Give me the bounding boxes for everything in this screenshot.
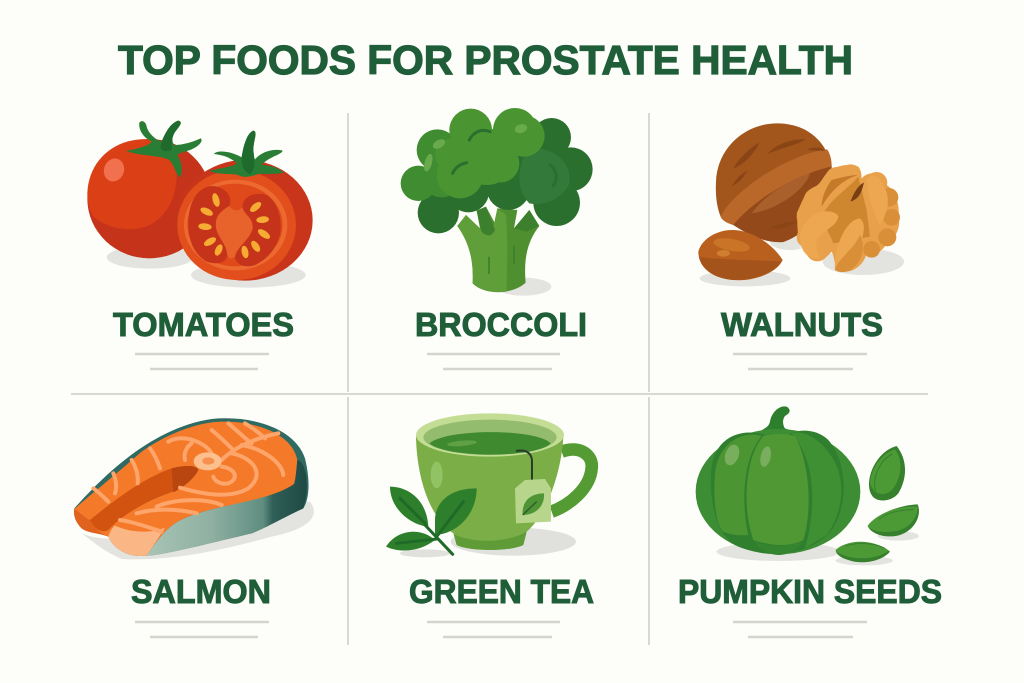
panel: broccoli bbox=[401, 108, 593, 369]
icon: pumpkin bbox=[696, 406, 860, 561]
placeholder lines: green tea bbox=[427, 622, 560, 637]
panel: walnuts bbox=[698, 123, 904, 369]
placeholder lines: tomatoes bbox=[135, 354, 269, 369]
placeholder lines: broccoli bbox=[427, 354, 560, 369]
icon: tomatoes bbox=[87, 121, 313, 288]
label: green tea: GREEN TEA bbox=[409, 573, 594, 610]
canopy front bbox=[401, 129, 462, 201]
icon: green tea cup bbox=[400, 413, 592, 557]
title: TOP FOODS FOR PROSTATE HEALTH bbox=[118, 37, 853, 83]
label: pumpkin seeds: PUMPKIN SEEDS bbox=[678, 573, 942, 610]
icon: pumpkin seeds bbox=[836, 446, 919, 565]
panel: salmon bbox=[74, 418, 314, 637]
placeholder lines: walnuts bbox=[733, 354, 867, 369]
icon: salmon bbox=[74, 418, 314, 559]
icon: broccoli bbox=[401, 108, 593, 296]
label: broccoli: BROCCOLI bbox=[415, 306, 587, 343]
icon: tea leaves bbox=[386, 487, 477, 554]
canopy back bbox=[418, 118, 593, 233]
panel: pumpkin seeds bbox=[678, 406, 942, 637]
placeholder lines: salmon bbox=[135, 622, 269, 637]
placeholder lines: pumpkin seeds bbox=[733, 622, 867, 637]
panel: green tea bbox=[386, 413, 594, 637]
label: tomatoes: TOMATOES bbox=[113, 306, 294, 343]
icon: walnuts bbox=[698, 123, 904, 286]
label: salmon: SALMON bbox=[131, 573, 271, 610]
label: walnuts: WALNUTS bbox=[721, 306, 883, 343]
panel: tomatoes bbox=[87, 121, 313, 369]
